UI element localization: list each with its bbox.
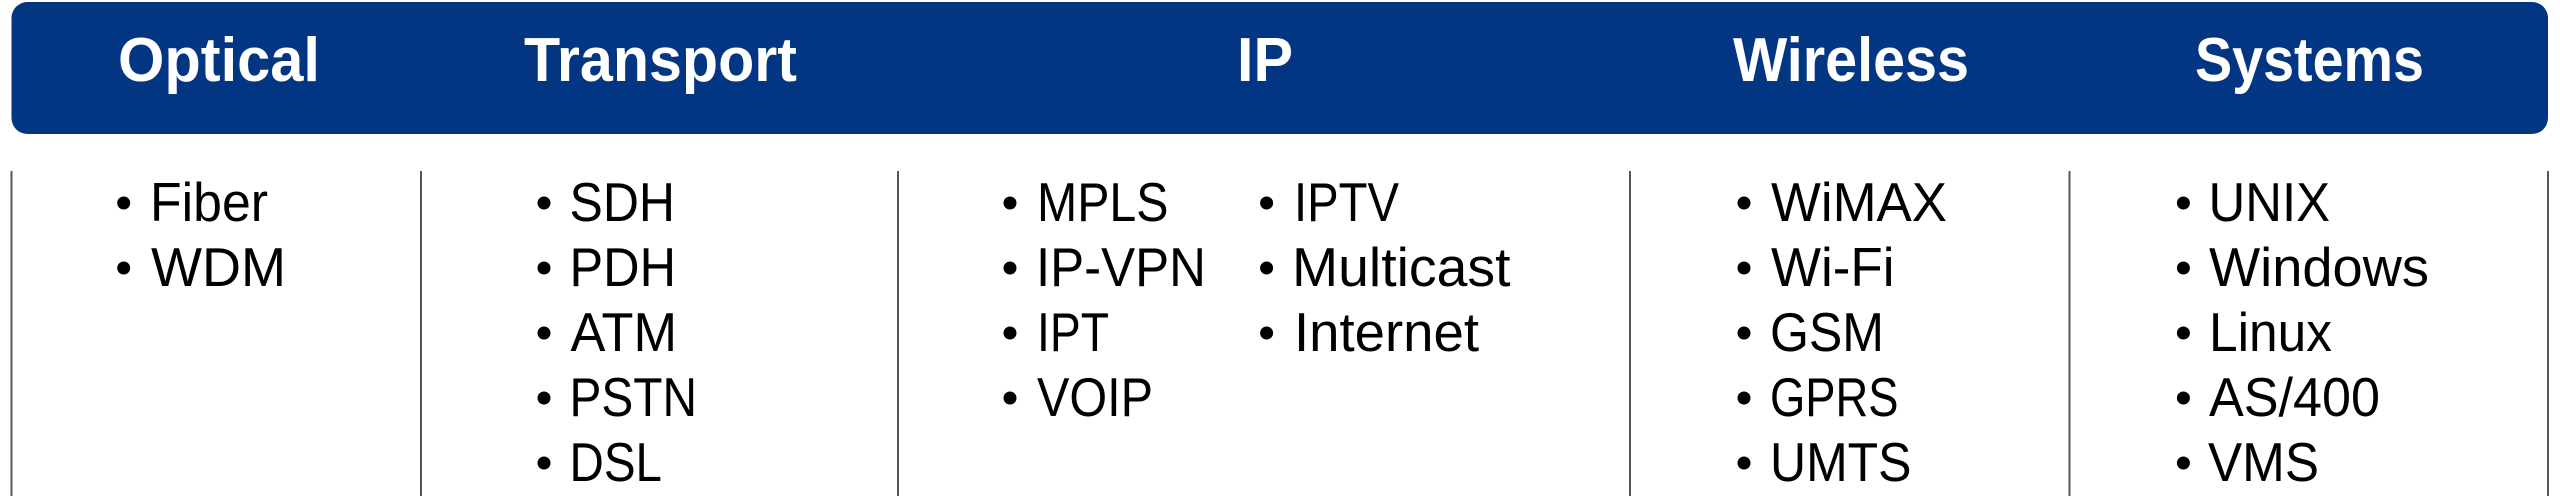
heading: Optical: Optical	[118, 26, 320, 95]
header band	[12, 2, 2548, 134]
heading: IP: IP	[1237, 26, 1293, 95]
list: IP second column	[1260, 171, 1510, 363]
list: IP second column: Multicast	[1292, 236, 1510, 298]
list: Optical: Fiber	[150, 171, 268, 233]
list: IP second column: IPTV	[1294, 171, 1399, 233]
list: Wireless: GSM	[1770, 301, 1884, 363]
list: IP first column: VOIP	[1037, 366, 1153, 428]
list: Transport: PSTN	[570, 366, 697, 428]
list: Systems: VMS	[2208, 431, 2319, 493]
list: IP first column: MPLS	[1037, 171, 1168, 233]
list: Systems	[2177, 171, 2429, 493]
list: IP second column: Internet	[1294, 301, 1479, 363]
list: Transport: DSL	[570, 431, 662, 493]
list: IP first column: IP-VPN	[1036, 236, 1206, 298]
heading: Systems: Systems	[2195, 26, 2424, 95]
list: IP first column: IPT	[1037, 301, 1109, 363]
list: Transport: PDH	[570, 236, 676, 298]
heading: Wireless: Wireless	[1733, 26, 1969, 95]
list: Transport: ATM	[570, 301, 677, 363]
list: Wireless: WiMAX	[1771, 171, 1947, 233]
list: Wireless: UMTS	[1770, 431, 1912, 493]
list: Wireless	[1738, 171, 1947, 493]
list: Optical	[117, 171, 286, 298]
list: Wireless: Wi-Fi	[1771, 236, 1894, 298]
list: Wireless: GPRS	[1770, 366, 1898, 428]
heading: Transport: Transport	[524, 26, 797, 95]
list: Transport	[538, 171, 697, 493]
list: Systems: UNIX	[2208, 171, 2330, 233]
list: Systems: AS/400	[2209, 366, 2380, 428]
list: Systems: Windows	[2209, 236, 2429, 298]
list: Transport: SDH	[570, 171, 675, 233]
list: IP first column	[1004, 171, 1206, 428]
list: Systems: Linux	[2209, 301, 2332, 363]
list: Optical: WDM	[151, 236, 286, 298]
